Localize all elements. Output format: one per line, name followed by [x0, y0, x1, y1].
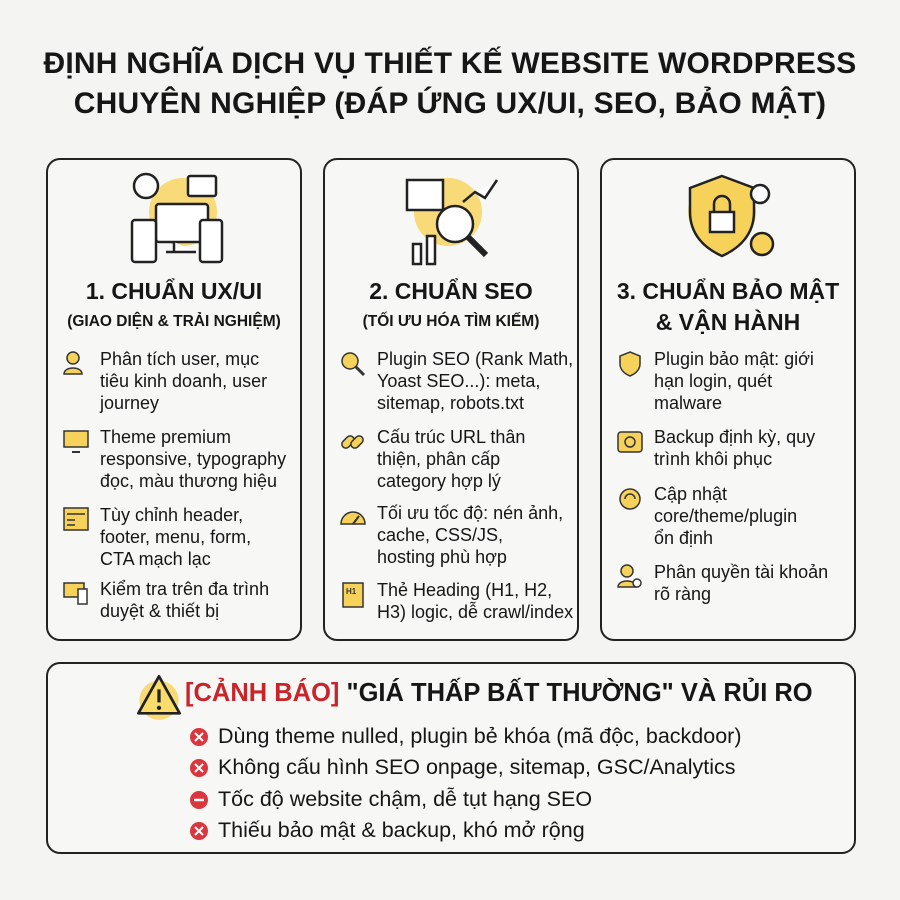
item [617, 427, 816, 469]
panel: UX/UI: đọc, màu thương hiệu [100, 471, 277, 491]
heading: 1. CHUẨN UX/UI [86, 278, 262, 304]
panel: UX/UI: Tùy chỉnh header, [100, 505, 243, 525]
item [63, 579, 269, 621]
warning item [190, 755, 736, 779]
item [341, 427, 525, 491]
panel: SEO [323, 158, 579, 641]
panel: UX/UI: Theme premium [100, 427, 231, 447]
panel: security: trình khôi phục [654, 449, 772, 469]
panel: SEO: hosting phù hợp [377, 547, 507, 567]
subheading: (GIAO DIỆN & TRẢI NGHIỆM) [67, 313, 281, 330]
panel: security: Plugin bảo mật: giới [654, 349, 814, 369]
panel: SEO: Thẻ Heading (H1, H2, [377, 580, 552, 600]
item [617, 562, 828, 604]
icon: shield lock [688, 174, 774, 258]
panel: security: hạn login, quét [654, 371, 772, 391]
panel: SEO: Yoast SEO...): meta, [377, 371, 540, 391]
icon: seo magnifier [406, 178, 498, 266]
panel: UX/UI: responsive, typography [100, 449, 286, 469]
panel: warning: Dùng theme nulled, plugin bẻ khóa (mã độc, backdoor) [218, 724, 742, 748]
title: CHUYÊN NGHIỆP (ĐÁP ỨNG UX/UI, SEO, BẢO MẬT) [74, 87, 826, 120]
warning item [190, 724, 742, 748]
heading: & VẬN HÀNH [656, 309, 800, 335]
panel: UX/UI: footer, menu, form, [100, 527, 251, 547]
panel: security: Backup định kỳ, quy [654, 427, 815, 447]
item [342, 580, 573, 622]
panel: security: Cập nhật [654, 484, 727, 504]
item [619, 484, 797, 548]
icon: devices [130, 172, 224, 264]
panel: security: rõ ràng [654, 584, 711, 604]
icon: warning triangle [137, 674, 182, 720]
warning item [190, 787, 592, 811]
panel: SEO: Cấu trúc URL thân [377, 427, 525, 447]
heading: 3. CHUẨN BẢO MẬT [617, 278, 839, 304]
panel: SEO: cache, CSS/JS, [377, 525, 503, 545]
panel: UX/UI: Kiểm tra trên đa trình [100, 579, 269, 599]
panel: SEO: thiện, phân cấp [377, 449, 500, 469]
heading: 2. CHUẨN SEO [369, 278, 533, 304]
panel: SEO: category hợp lý [377, 471, 501, 491]
heading [617, 278, 839, 335]
panel: warning: Không cấu hình SEO onpage, sitemap, GSC/Analytics [218, 755, 736, 779]
panel: UX/UI: Phân tích user, mục [100, 349, 259, 369]
subheading: (TỐI ƯU HÓA TÌM KIẾM) [363, 313, 539, 330]
item [63, 427, 286, 491]
title: ĐỊNH NGHĨA DỊCH VỤ THIẾT KẾ WEBSITE WORDPRESS [44, 47, 856, 80]
panel: UX/UI: CTA mạch lạc [100, 549, 211, 569]
panel: security: Phân quyền tài khoản [654, 562, 828, 582]
panel: UX/UI: journey [100, 393, 159, 413]
item [63, 505, 251, 569]
panel: SEO: Tối ưu tốc độ: nén ảnh, [377, 503, 563, 523]
panel: warning: Thiếu bảo mật & backup, khó mở rộng [218, 818, 585, 842]
panel: SEO: H3) logic, dễ crawl/index [377, 602, 573, 622]
title [44, 46, 856, 120]
panel: SEO: sitemap, robots.txt [377, 393, 524, 413]
item [63, 349, 267, 413]
item [340, 503, 563, 567]
panel: SEO: H1 [346, 587, 357, 596]
panel: UX/UI: tiêu kinh doanh, user [100, 371, 267, 391]
warning item [190, 818, 585, 842]
panel: security: ổn định [654, 528, 713, 548]
item [619, 349, 814, 413]
panel: security: malware [654, 393, 722, 413]
panel: UX/UI: duyệt & thiết bị [100, 601, 219, 621]
panel: UX/UI [46, 158, 302, 641]
panel: SEO: Plugin SEO (Rank Math, [377, 349, 573, 369]
panel: security [600, 158, 856, 641]
panel: security: core/theme/plugin [654, 506, 797, 526]
item [341, 349, 573, 413]
panel: warning [46, 662, 856, 854]
panel: warning: Tốc độ website chậm, dễ tụt hạng SEO [218, 787, 592, 811]
warning heading: [CẢNH BÁO] "GIÁ THẤP BẤT THƯỜNG" VÀ RỦI RO [185, 679, 813, 707]
